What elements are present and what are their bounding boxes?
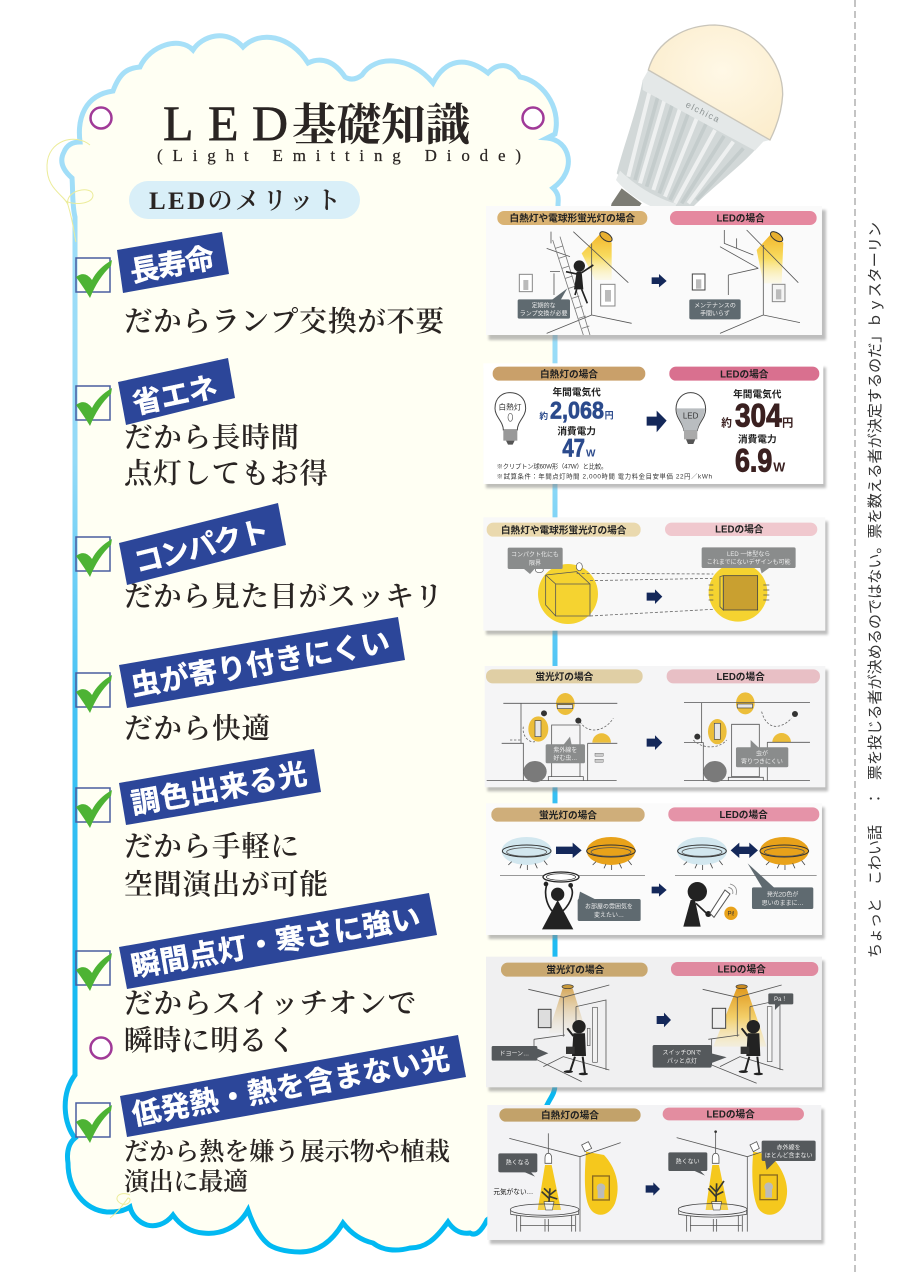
stat: incandescent power: W <box>586 449 596 460</box>
text: benefit 2: 点灯してもお得 <box>124 458 328 490</box>
panel: low heat comparison <box>487 1105 824 1244</box>
callout: instant on <box>653 1045 727 1068</box>
label: no energy: 元気がない… <box>493 1187 533 1196</box>
callout: gets hot: 熱くなる <box>506 1159 530 1167</box>
banner: 長寿命 <box>117 232 229 293</box>
text: benefit 3: だから見た目がスッキリ <box>124 581 443 613</box>
callout: bugs avoid <box>736 740 788 767</box>
item 7: low heat <box>76 1035 466 1196</box>
decorative ring: lower left <box>90 1038 112 1058</box>
arrow <box>646 1182 660 1196</box>
icon: check box <box>76 386 112 426</box>
callout: change mood: お部屋の雰囲気を <box>585 902 633 910</box>
callout: no infrared: ほとんど含まない <box>765 1151 812 1159</box>
text: benefit 6: だからスイッチオンで <box>124 989 416 1020</box>
illustration: bright entrance <box>703 985 783 1083</box>
callout: new design: LED 一体型なら <box>727 550 770 558</box>
banner: 虫が寄り付きにくい: 虫が寄り付きにくい <box>128 625 392 703</box>
banner: コンパクト: コンパクト <box>131 515 273 580</box>
stat: LED power: 消費電力 <box>738 434 777 446</box>
text: benefit 5 <box>124 831 328 901</box>
callout: regular replacement <box>518 288 570 319</box>
side note: 票を投じる者が決めるのではない。票を数える者が決定するのだ」ｂｙスターリン <box>867 222 884 780</box>
callout: Pa <box>768 993 793 1010</box>
item 1: long life <box>76 232 444 338</box>
illustration: person with remote <box>683 882 738 927</box>
callout: gloomy <box>492 1046 548 1061</box>
panel: long life comparison <box>486 206 826 340</box>
header: fluorescent: 蛍光灯の場合 <box>539 809 597 821</box>
callout: two colors: 発光2D色が <box>767 890 798 898</box>
panel: insects comparison <box>485 666 828 791</box>
text: benefit 7: 演出に最適 <box>124 1168 248 1196</box>
header: fluorescent: 蛍光灯の場合 <box>535 671 594 683</box>
header: fluorescent <box>486 669 643 683</box>
decorative ring: top right <box>522 108 544 128</box>
callout: compact limit: コンパクト化にも <box>511 550 559 558</box>
footnotes <box>497 461 712 480</box>
illustration: LED room <box>692 230 800 333</box>
header: fluorescent <box>501 963 648 977</box>
icon: check box <box>76 788 112 828</box>
side note: ： <box>867 791 884 806</box>
callout: regular replacement: 定期的な <box>532 302 556 310</box>
header: LED: LEDの場合 <box>716 213 765 225</box>
text: benefit 7 <box>124 1138 450 1196</box>
text: benefit 2: だから長時間 <box>124 422 299 454</box>
header: LED: LEDの場合 <box>715 524 764 536</box>
stat: incandescent power <box>557 425 596 463</box>
title: D <box>252 95 288 151</box>
dashed cut line <box>854 0 856 1273</box>
text: benefit 7: だから熱を嫌う展示物や植栽 <box>124 1138 450 1166</box>
panel: compact comparison <box>483 517 828 635</box>
callout: bug attraction: 紫外線を <box>553 746 577 754</box>
header: LED <box>670 211 817 225</box>
illustration: compact LED fixture <box>709 563 769 622</box>
subtitle: (Light Emitting Diode) <box>157 146 521 165</box>
item 4: insects <box>76 617 405 745</box>
header: incandescent: 白熱灯の場合 <box>541 1109 599 1121</box>
stat: LED annual cost <box>721 388 793 434</box>
header: incandescent <box>493 367 645 381</box>
callout: regular replacement: ランプ交換が必要 <box>520 310 568 318</box>
header: LED: LEDの場合 <box>716 671 765 683</box>
footnotes: ※試算条件：年間点灯時間 2,000時間 電力料金目安単価 22円／kWh <box>497 471 712 480</box>
arrow <box>647 589 662 604</box>
callout: no infrared <box>762 1141 816 1170</box>
header: LED: LEDの場合 <box>719 809 768 821</box>
title: E <box>208 95 239 151</box>
decorative ring: top left <box>90 108 112 128</box>
stat: incandescent annual cost <box>539 387 614 425</box>
side note: こわい話 <box>867 825 884 885</box>
header: LED <box>663 1108 804 1120</box>
stat: incandescent power: 消費電力 <box>557 425 596 437</box>
text: benefit 6: 瞬時に明るく <box>124 1025 296 1057</box>
callout: change mood: 変えたい… <box>594 911 624 919</box>
item 5: dimming <box>76 749 328 901</box>
callout: not hot: 熱くない <box>676 1158 700 1166</box>
header: LED <box>669 367 819 381</box>
callout: gets hot <box>498 1153 537 1177</box>
callout: bug attraction: 好む虫… <box>553 754 577 762</box>
banner: 長寿命: 長寿命 <box>127 242 217 289</box>
panel: cloud background <box>62 36 568 1252</box>
item 6: instant lighting <box>76 893 437 1057</box>
stat: incandescent annual cost: 円 <box>605 411 614 421</box>
stat: LED power: 6.9 <box>735 443 772 479</box>
callout: no maintenance: メンテナンスの <box>694 303 736 310</box>
stat: incandescent annual cost: 2,068 <box>550 398 604 425</box>
header: fluorescent <box>491 808 645 822</box>
header: LED: LEDの場合 <box>720 368 769 380</box>
banner: 調色出来る光: 調色出来る光 <box>128 757 310 821</box>
icon: LED bulb: elchica <box>684 99 722 125</box>
illustration: ladder maintenance <box>519 230 632 335</box>
arrow <box>647 411 667 432</box>
text: benefit 4: だから快適 <box>124 713 270 745</box>
text: benefit 6 <box>124 989 416 1057</box>
heading pill: LEDのメリット: LEDのメリット <box>149 188 341 215</box>
title: L <box>163 95 194 151</box>
stat: incandescent annual cost: 約 <box>539 410 548 421</box>
item 2: energy saving <box>76 358 328 490</box>
header: incandescent <box>499 1108 641 1122</box>
banner: 省エネ: 省エネ <box>130 371 221 421</box>
arrow <box>657 1013 671 1027</box>
footnotes: ※クリプトン球60W形（47W）と比較。 <box>497 461 607 470</box>
callout: new design: これまでにないデザインも可能 <box>707 558 791 566</box>
stat: LED annual cost: 約 <box>721 417 732 430</box>
illustration: person with remote: Pi! <box>727 912 735 918</box>
callout: instant on: スイッチONで <box>663 1049 701 1056</box>
icon: LED bulb <box>676 393 706 444</box>
icon: check box <box>76 1103 112 1143</box>
stat: incandescent annual cost: 年間電気代 <box>553 387 601 399</box>
callout: two colors: 思いのままに… <box>762 900 804 907</box>
illustration: dim entrance <box>528 985 609 1082</box>
header: conventional <box>487 523 641 537</box>
header: fluorescent: 蛍光灯の場合 <box>546 964 605 976</box>
callout: compact limit: 限界 <box>529 559 541 567</box>
header: LED <box>667 669 820 683</box>
callout: instant on: パッと点灯 <box>667 1057 697 1065</box>
stat: LED annual cost: 304 <box>735 398 782 434</box>
arrow <box>647 735 662 750</box>
callout: change mood <box>578 892 641 921</box>
stat: LED power: W <box>773 461 785 475</box>
text: benefit 5: 空間演出が可能 <box>124 869 328 901</box>
illustration: incandescent on plant <box>509 1133 621 1232</box>
header: LED <box>668 807 819 821</box>
callout: no maintenance: 手間いらず <box>700 310 730 318</box>
stat: LED annual cost: 円 <box>782 417 793 430</box>
arrow <box>652 883 667 897</box>
header: LED <box>665 523 817 536</box>
icon: LED bulb: LED <box>683 411 699 420</box>
callout: bugs avoid: 寄りつきにくい <box>741 757 783 765</box>
illustration: fluorescent room <box>487 693 617 782</box>
header: conventional: 白熱灯や電球形蛍光灯の場合 <box>510 213 635 225</box>
illustration: LED room <box>684 692 810 782</box>
callout: not hot <box>668 1152 707 1176</box>
icon: check box <box>76 537 112 577</box>
header: LED: LEDの場合 <box>707 1108 755 1120</box>
header: conventional: 白熱灯や電球形蛍光灯の場合 <box>501 524 627 536</box>
title: 基礎知識 <box>292 100 473 150</box>
header: incandescent: 白熱灯の場合 <box>540 368 598 380</box>
icon: incandescent bulb <box>495 393 526 445</box>
callout: bug attraction <box>546 737 585 763</box>
icon: check box <box>76 673 112 713</box>
callout: gloomy: ドヨーン… <box>500 1051 529 1058</box>
panel: energy saving comparison <box>483 363 826 488</box>
title <box>163 95 473 151</box>
callout: no infrared: 赤外線を <box>777 1143 801 1151</box>
callout: no maintenance <box>689 299 741 319</box>
header: conventional <box>497 211 647 225</box>
illustration: person replacing lamp <box>542 872 579 929</box>
icon: LED bulb <box>610 25 783 213</box>
callout: Pa: Pa！ <box>774 996 787 1003</box>
illustration: bulky fixture <box>535 563 713 624</box>
item 3: compact <box>76 503 443 613</box>
banner: コンパクト <box>119 503 286 585</box>
text: benefit 2 <box>124 422 328 490</box>
callout: compact limit <box>508 548 563 574</box>
side note: ちょっと <box>867 898 884 958</box>
stat: LED annual cost: 年間電気代 <box>733 388 782 400</box>
header: LED: LEDの場合 <box>717 964 766 976</box>
icon: check box <box>76 258 112 298</box>
illustration: cool and warm ceiling lights <box>500 837 817 876</box>
panel: dimming comparison <box>486 803 825 939</box>
callout: bugs avoid: 虫が <box>756 749 768 757</box>
callout: new design <box>702 547 796 573</box>
heading pill: LEDのメリット <box>129 181 360 219</box>
text: benefit 1: だからランプ交換が不要 <box>124 306 444 338</box>
banner: 低発熱・熱を含まない光: 低発熱・熱を含まない光 <box>129 1042 452 1132</box>
arrow <box>652 274 667 287</box>
text: benefit 5: だから手軽に <box>124 831 299 863</box>
callout: two colors <box>748 863 813 909</box>
illustration: LED on plant <box>677 1130 790 1232</box>
banner: 瞬間点灯・寒さに強い: 瞬間点灯・寒さに強い <box>129 902 423 984</box>
stat: incandescent power: 47 <box>562 436 585 463</box>
icon: incandescent bulb: 白熱灯 <box>499 401 522 411</box>
header: LED <box>671 962 818 976</box>
icon: check box <box>76 951 112 991</box>
banner: 省エネ <box>118 358 235 425</box>
panel: instant lighting comparison <box>486 957 825 1091</box>
